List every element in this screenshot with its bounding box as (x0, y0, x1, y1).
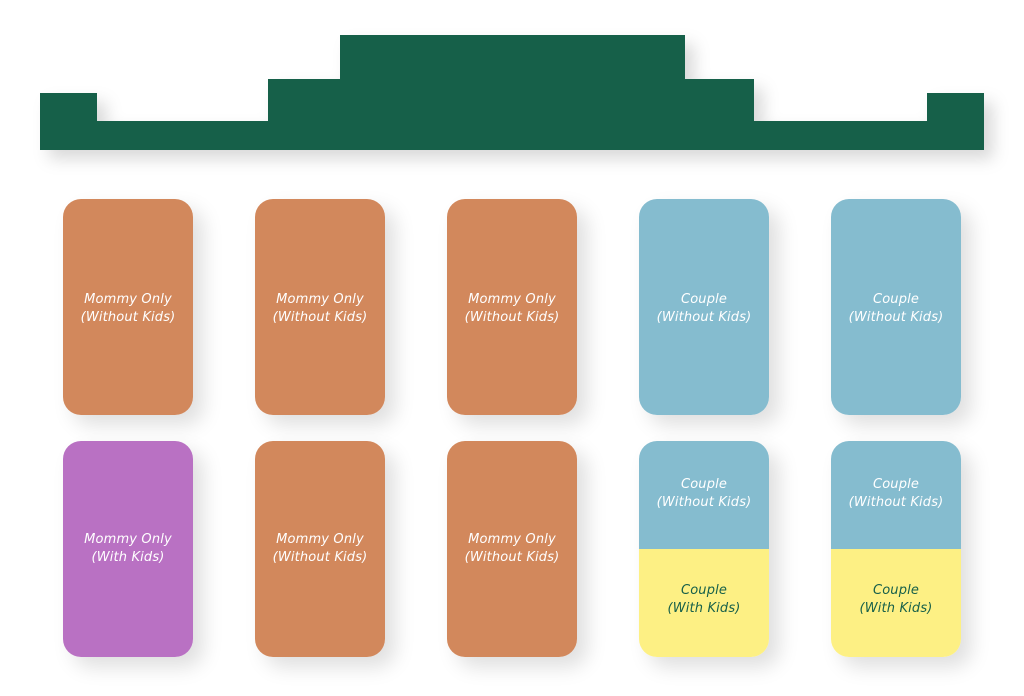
label: Mommy Only (84, 532, 172, 547)
label (81, 292, 175, 325)
card: row 2 column 2 (255, 441, 385, 657)
label: Mommy Only (468, 292, 556, 307)
label (465, 532, 559, 565)
section: couple without kids (639, 441, 769, 549)
card: row 2 column 4 split (639, 441, 769, 657)
label (849, 292, 943, 325)
label: (Without Kids) (849, 310, 943, 325)
card: row 2 column 1 (63, 441, 193, 657)
section: couple without kids: (Without Kids) (657, 495, 751, 510)
label: (Without Kids) (273, 310, 367, 325)
label: Mommy Only (276, 532, 364, 547)
card: row 2 column 5 split (831, 441, 961, 657)
section: couple with kids: (With Kids) (860, 601, 932, 616)
card: row 1 column 1 (63, 199, 193, 415)
label (273, 532, 367, 565)
label: Mommy Only (84, 292, 172, 307)
section: couple without kids (831, 441, 961, 549)
label: Mommy Only (468, 532, 556, 547)
label: (Without Kids) (81, 310, 175, 325)
label: (Without Kids) (273, 550, 367, 565)
label: (Without Kids) (465, 310, 559, 325)
card: row 1 column 3 (447, 199, 577, 415)
label: Couple (681, 292, 727, 307)
section: couple without kids: (Without Kids) (849, 495, 943, 510)
section: couple without kids: Couple (681, 477, 727, 492)
section: couple without kids: Couple (873, 477, 919, 492)
card: row 1 column 4 (639, 199, 769, 415)
label (657, 292, 751, 325)
label: Couple (873, 292, 919, 307)
label: (With Kids) (92, 550, 164, 565)
card: row 1 column 2 (255, 199, 385, 415)
section: couple with kids: Couple (873, 583, 919, 598)
label (273, 292, 367, 325)
section: couple with kids: (With Kids) (668, 601, 740, 616)
section: couple with kids: Couple (681, 583, 727, 598)
card: row 1 column 5 (831, 199, 961, 415)
banner: stepped green shape (40, 35, 999, 165)
section: couple with kids (639, 549, 769, 657)
label: (Without Kids) (657, 310, 751, 325)
label: (Without Kids) (465, 550, 559, 565)
label: Mommy Only (276, 292, 364, 307)
section: couple with kids (831, 549, 961, 657)
card: row 2 column 3 (447, 441, 577, 657)
label (84, 532, 172, 565)
label (465, 292, 559, 325)
